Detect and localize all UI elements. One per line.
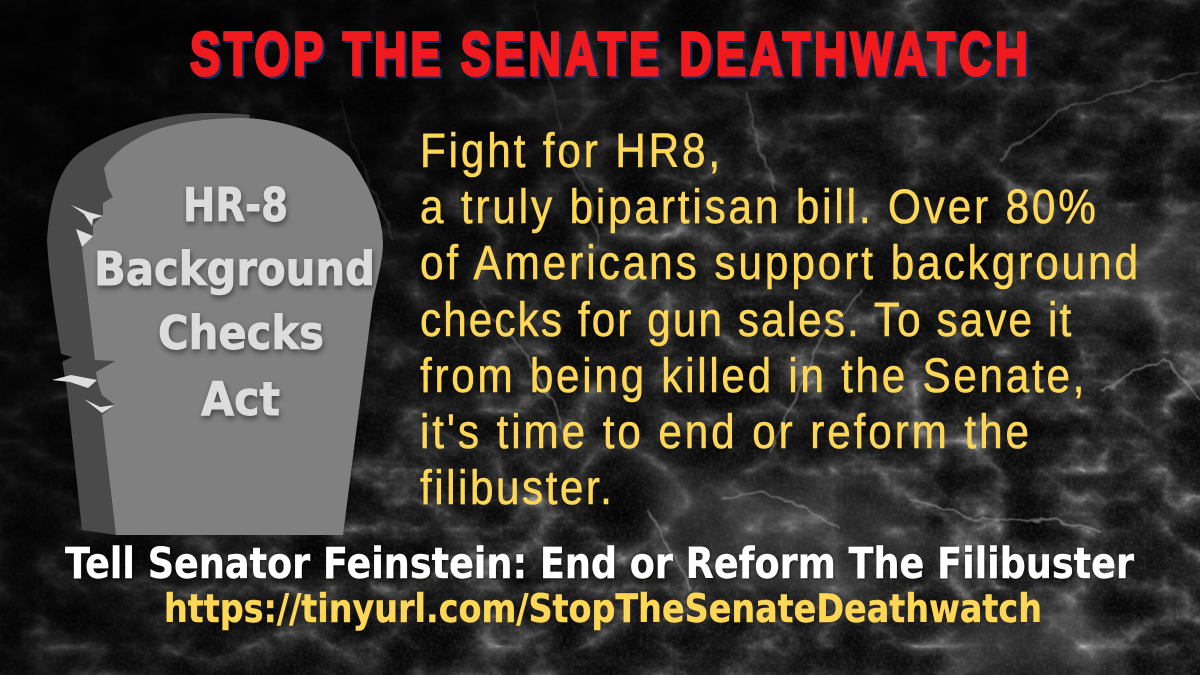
tombstone inscription: Background: [94, 242, 375, 296]
tombstone front face: [82, 118, 383, 535]
body text: filibuster.: [420, 460, 612, 515]
tombstone: [47, 113, 383, 535]
body text: of Americans support background: [420, 235, 1138, 290]
body text: from being killed in the Senate,: [420, 348, 1084, 403]
body text: it's time to end or reform the: [420, 404, 1029, 459]
body text: [420, 123, 1138, 515]
tombstone back side: [47, 113, 250, 535]
tombstone inscription: [94, 178, 375, 426]
cracks and shards: [52, 205, 115, 413]
tombstone inscription: HR-8: [183, 178, 288, 232]
tombstone inscription: Checks: [158, 306, 324, 360]
body text: Fight for HR8,: [420, 123, 720, 178]
title: STOP THE SENATE DEATHWATCH: [190, 20, 1028, 89]
body text: checks for gun sales. To save it: [420, 292, 1072, 347]
link url: https://tinyurl.com/StopTheSenateDeathwatch: [164, 587, 1042, 632]
tombstone inscription: Act: [201, 372, 280, 426]
body text: a truly bipartisan bill. Over 80%: [420, 179, 1096, 234]
